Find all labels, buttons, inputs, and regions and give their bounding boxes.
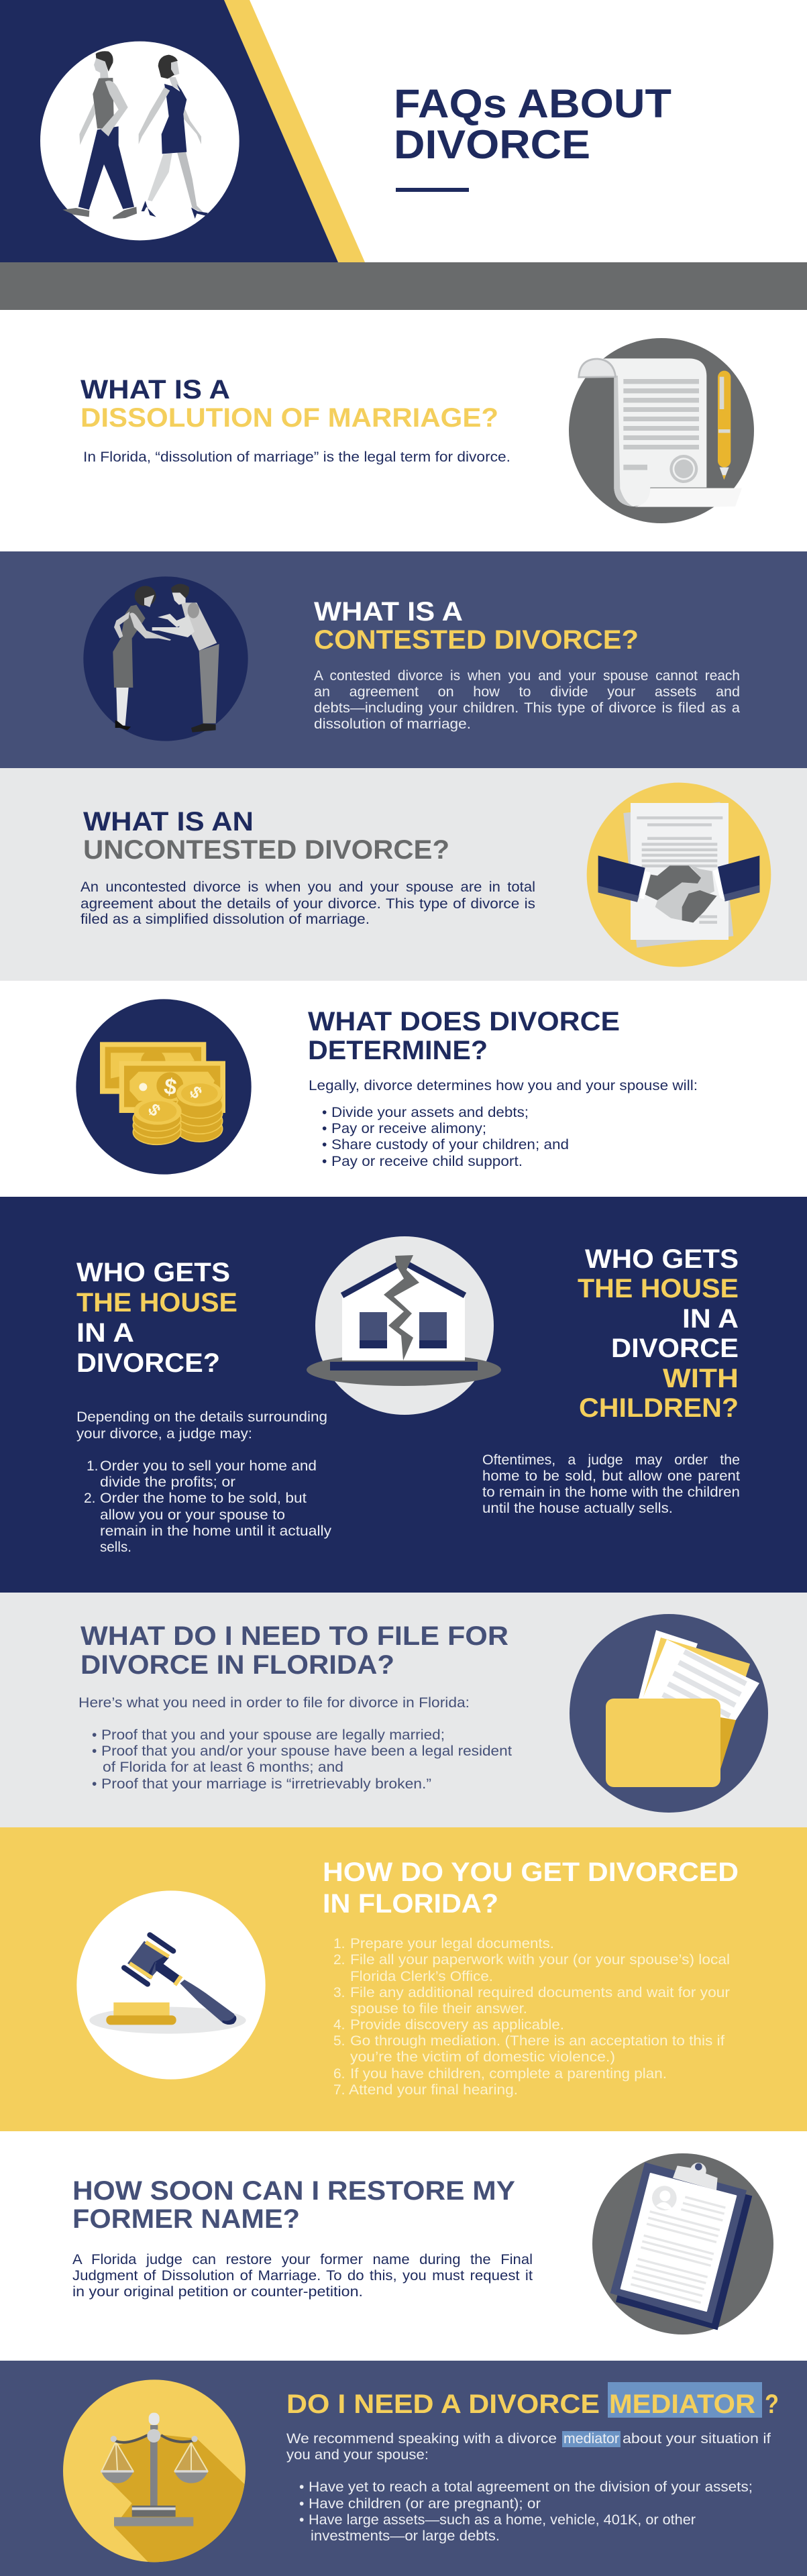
numbered steps: Prepare your legal documents. xyxy=(350,1936,554,1951)
bullet list: • xyxy=(92,1776,97,1792)
left body text: Order the home to be sold, but xyxy=(100,1491,307,1506)
icon: cash and coins: $ xyxy=(186,1083,205,1103)
numbered steps: Florida Clerk’s Office. xyxy=(350,1969,493,1984)
heading: WHAT DO I NEED TO FILE FOR xyxy=(80,1621,508,1651)
bullet list xyxy=(92,1727,512,1792)
heading xyxy=(72,2176,515,2234)
numbered steps: 5. xyxy=(333,2033,345,2049)
bullet list: • xyxy=(322,1137,327,1152)
bullet list: • xyxy=(322,1121,327,1136)
heading: DETERMINE? xyxy=(308,1036,488,1065)
left body text: Depending on the details surrounding xyxy=(76,1409,327,1425)
panel: how do you get divorced xyxy=(0,1827,807,2131)
body text: A Florida judge can restore your former name during the Final xyxy=(72,2252,533,2267)
body text: A contested divorce is when you and your spouse cannot reach xyxy=(314,668,740,684)
heading: who gets the house in a divorce: DIVORCE? xyxy=(76,1348,220,1378)
heading: WHAT IS A xyxy=(314,597,463,627)
panel: uncontested divorce xyxy=(0,768,807,981)
heading: HOW DO YOU GET DIVORCED xyxy=(323,1858,739,1887)
icon: cash and coins: $ xyxy=(144,1100,164,1120)
heading: who gets the house in a divorce xyxy=(76,1258,237,1378)
numbered steps: Attend your final hearing. xyxy=(349,2082,518,2098)
left body text: allow you or your spouse to xyxy=(100,1507,285,1523)
numbered steps: If you have children, complete a parenting plan. xyxy=(350,2066,667,2082)
bullet list: • xyxy=(299,2496,304,2512)
numbered steps: File any additional required documents and wait for your xyxy=(350,1985,730,2000)
body text: An uncontested divorce is when you and your spouse are in total xyxy=(80,879,535,895)
body text xyxy=(80,879,535,927)
panel: header xyxy=(0,0,807,310)
heading: who gets the house with children: IN A xyxy=(682,1304,739,1334)
body text: dissolution of marriage. xyxy=(314,716,471,732)
title: DIVORCE xyxy=(394,122,590,167)
heading: who gets the house in a divorce: THE HOUSE xyxy=(76,1288,237,1318)
bullet list: Have yet to reach a total agreement on the division of your assets; xyxy=(309,2479,753,2495)
heading: who gets the house with children: DIVORCE xyxy=(611,1334,739,1363)
left body text: sells. xyxy=(100,1540,131,1555)
heading xyxy=(80,375,498,433)
numbered steps: Provide discovery as applicable. xyxy=(350,2017,564,2033)
heading: CONTESTED DIVORCE? xyxy=(314,625,639,655)
heading: who gets the house with children: CHILDREN? xyxy=(579,1393,739,1423)
body text with highlighted word: about your situation if xyxy=(623,2431,771,2447)
body text with highlighted word: mediator xyxy=(563,2431,619,2447)
body text: debts—including your children. This type of divorce is filed as a xyxy=(314,700,740,716)
bullet list: Proof that your marriage is “irretrievably broken.” xyxy=(101,1776,431,1792)
heading: WHAT IS AN xyxy=(83,807,254,837)
title rule xyxy=(396,188,469,192)
numbered steps: 3. xyxy=(333,1985,345,2000)
panel: contested divorce xyxy=(0,551,807,768)
bullet list: Proof that you and/or your spouse have been a legal resident xyxy=(101,1743,512,1759)
panel: do I need a mediator xyxy=(0,2361,807,2576)
heading: who gets the house with children: THE HOUSE xyxy=(578,1274,739,1303)
left body text: 1. xyxy=(87,1458,99,1474)
right body text: to remain in the home with the children xyxy=(482,1485,740,1500)
body text with highlighted word: We recommend speaking with a divorce xyxy=(286,2431,557,2447)
heading: who gets the house with children: WHO GETS xyxy=(585,1244,739,1274)
body text: Here’s what you need in order to file for divorce in Florida: xyxy=(78,1695,470,1711)
numbered steps: 6. xyxy=(333,2066,345,2082)
numbered steps xyxy=(333,1936,730,2098)
heading with highlighted word: DO I NEED A DIVORCE xyxy=(286,2390,600,2419)
heading xyxy=(314,597,639,655)
left body text: your divorce, a judge may: xyxy=(76,1426,252,1442)
numbered steps: Go through mediation. (There is an acceptation to this if xyxy=(350,2033,724,2049)
heading with highlighted word: ? xyxy=(765,2390,779,2419)
panel: what does divorce determine xyxy=(0,981,807,1197)
bullet list xyxy=(322,1105,569,1169)
title: FAQs ABOUT xyxy=(394,81,671,126)
bullet list: Pay or receive alimony; xyxy=(331,1121,486,1136)
numbered steps: 4. xyxy=(333,2017,345,2033)
panel: who gets the house xyxy=(0,1197,807,1593)
left body text: Order you to sell your home and xyxy=(100,1458,317,1474)
body text: Judgment of Dissolution of Marriage. To do this, you must request it xyxy=(72,2268,533,2284)
body text with highlighted word xyxy=(286,2431,771,2463)
bullet list: investments—or large debts. xyxy=(311,2528,500,2544)
bullet list: • xyxy=(322,1154,327,1169)
bullet list: Divide your assets and debts; xyxy=(331,1105,529,1120)
body text: agreement about the details of your divorce. This type of divorce is xyxy=(80,896,535,912)
title xyxy=(394,81,671,167)
bullet list: • xyxy=(299,2512,304,2528)
panel: dissolution of marriage xyxy=(0,310,807,551)
heading: HOW SOON CAN I RESTORE MY xyxy=(72,2176,515,2206)
right body text: until the house actually sells. xyxy=(482,1501,673,1516)
bullet list: • xyxy=(299,2479,304,2495)
bullet list: Have children (or are pregnant); or xyxy=(309,2496,541,2512)
numbered steps: spouse to file their answer. xyxy=(350,2001,527,2017)
bullet list: • xyxy=(322,1105,327,1120)
heading: WHAT IS A xyxy=(80,375,230,405)
heading: who gets the house with children: WITH xyxy=(663,1364,739,1393)
bullet list: • xyxy=(92,1743,97,1759)
icon: handshake over document xyxy=(587,783,771,967)
body text: In Florida, “dissolution of marriage” is the legal term for divorce. xyxy=(83,449,510,465)
heading xyxy=(83,807,449,865)
body text with highlighted word: you and your spouse: xyxy=(286,2447,429,2463)
right body text xyxy=(482,1452,740,1516)
heading: FORMER NAME? xyxy=(72,2204,300,2234)
body text: an agreement on how to divide your assets and xyxy=(314,684,740,700)
bullet list: Pay or receive child support. xyxy=(331,1154,523,1169)
heading: DIVORCE IN FLORIDA? xyxy=(80,1650,394,1680)
body text: Legally, divorce determines how you and your spouse will: xyxy=(309,1078,698,1093)
heading: WHAT DOES DIVORCE xyxy=(308,1007,620,1036)
bullet list: • xyxy=(92,1727,97,1743)
icon: folder with papers xyxy=(570,1614,768,1813)
heading: who gets the house in a divorce: WHO GETS xyxy=(76,1258,230,1287)
bullet list: of Florida for at least 6 months; and xyxy=(103,1760,343,1775)
icon: couple walking apart xyxy=(40,42,239,240)
icon: clipboard xyxy=(592,2153,773,2334)
icon: scroll and pen xyxy=(569,338,754,523)
icon: cash and coins xyxy=(76,999,252,1175)
heading: DISSOLUTION OF MARRIAGE? xyxy=(80,403,498,433)
heading: UNCONTESTED DIVORCE? xyxy=(83,835,449,865)
icon: scales of justice xyxy=(63,2379,248,2564)
icon: arguing couple xyxy=(83,576,248,741)
numbered steps: 7. xyxy=(333,2082,345,2098)
bullet list: Share custody of your children; and xyxy=(331,1137,569,1152)
numbered steps: File all your paperwork with your (or your spouse’s) local xyxy=(350,1952,730,1968)
body text xyxy=(72,2252,533,2300)
panel: restore former name xyxy=(0,2131,807,2361)
heading: who gets the house with children xyxy=(578,1244,739,1423)
numbered steps: 2. xyxy=(333,1952,345,1968)
bullet list: Have large assets—such as a home, vehicle, 401K, or other xyxy=(309,2512,696,2528)
icon: cash and coins: $ xyxy=(162,1074,178,1100)
body text xyxy=(314,668,740,732)
heading: who gets the house in a divorce: IN A xyxy=(76,1318,134,1348)
heading: IN FLORIDA? xyxy=(323,1889,498,1919)
left body text xyxy=(76,1409,332,1555)
body text: filed as a simplified dissolution of marriage. xyxy=(80,912,370,927)
icon: cracked house xyxy=(307,1236,501,1415)
body text: in your original petition or counter-petition. xyxy=(72,2284,363,2300)
right body text: home to be sold, but allow one parent xyxy=(482,1468,740,1484)
heading xyxy=(80,1621,508,1680)
left body text: remain in the home until it actually xyxy=(100,1523,332,1539)
left body text: divide the profits; or xyxy=(100,1474,235,1490)
right body text: Oftentimes, a judge may order the xyxy=(482,1452,740,1468)
numbered steps: you’re the victim of domestic violence.) xyxy=(350,2049,615,2065)
heading with highlighted word xyxy=(286,2382,779,2419)
left body text: 2. xyxy=(84,1491,96,1506)
heading xyxy=(323,1858,739,1919)
bullet list: Proof that you and your spouse are legally married; xyxy=(101,1727,445,1743)
heading with highlighted word: MEDIATOR xyxy=(609,2390,755,2419)
heading xyxy=(308,1007,620,1065)
bullet list xyxy=(299,2479,753,2544)
icon: gavel xyxy=(76,1890,266,2080)
panel: what do I need to file xyxy=(0,1593,807,1827)
numbered steps: 1. xyxy=(333,1936,345,1951)
